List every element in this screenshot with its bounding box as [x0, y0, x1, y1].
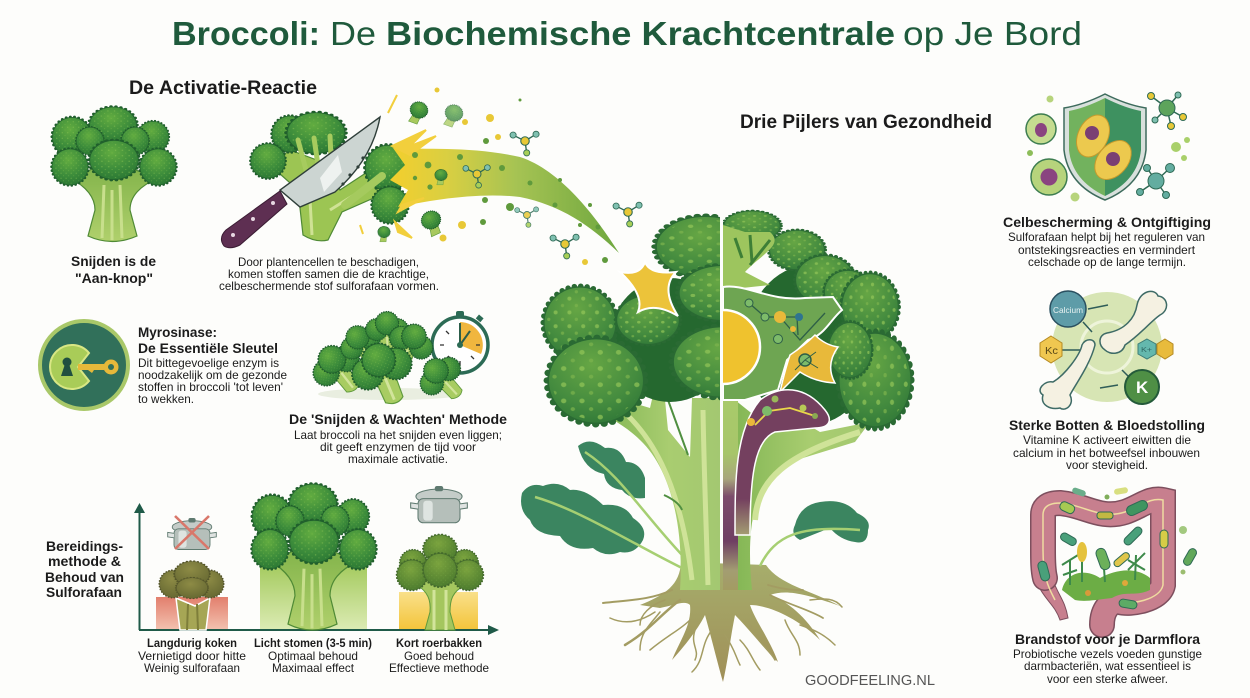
left half: crown — [540, 214, 720, 590]
text: darmflora: voor een sterke afweer. — [1047, 672, 1168, 686]
icon: pot — [411, 486, 467, 523]
title: De — [330, 15, 376, 52]
text: myrosinase: Dit bittegevoelige enzym is — [138, 356, 279, 370]
icon: stir-fried broccoli — [397, 535, 483, 630]
text: snijden en wachten: maximale activatie. — [348, 452, 448, 466]
caption: Snijden is de Aan-knop: "Aan-knop" — [75, 270, 153, 286]
icon: key and lock — [40, 321, 128, 409]
cross-section: cell — [723, 286, 842, 400]
chart title: Behoud van — [45, 569, 124, 585]
heading: Drie Pijlers van Gezondheid: Drie Pijlers van Gezondheid — [740, 112, 992, 133]
labels: langdurig koken: Vernietigd door hitte — [138, 649, 246, 663]
text: darmflora: Brandstof voor je Darmflora — [1015, 631, 1200, 647]
icon: knife — [221, 117, 380, 248]
heading: De Activatie-Reactie: De Activatie-Reactie — [129, 78, 317, 99]
panel: myrosinase — [40, 321, 287, 409]
title: Broccoli: — [172, 15, 320, 52]
text: beschadigen: Door plantencellen te beschadigen, — [238, 255, 419, 269]
axes — [134, 503, 499, 635]
text: snijden en wachten: dit geeft enzymen de tijd voor — [320, 440, 476, 454]
text: sterke botten: Sterke Botten & Bloedstolling — [1009, 417, 1205, 433]
title — [172, 15, 1082, 52]
illustration: central broccoli — [521, 211, 912, 682]
text: myrosinase: to wekken. — [138, 392, 194, 406]
text: snijden en wachten: Laat broccoli na het snijden even liggen; — [294, 428, 502, 442]
panel: whole broccoli — [52, 107, 176, 286]
text: myrosinase — [138, 324, 287, 406]
panel: sterke botten — [1009, 291, 1205, 472]
cross-section: nucleus — [723, 308, 762, 386]
icon: bones and vitamin K: Calcium — [1053, 305, 1083, 315]
labels: langdurig koken — [138, 636, 246, 675]
icon: cut broccoli pile — [303, 312, 475, 414]
chart title: Bereidings- — [46, 538, 123, 554]
chart title — [45, 538, 124, 600]
icon: shield and cells — [1026, 92, 1190, 202]
text: myrosinase: Myrosinase: — [138, 324, 217, 340]
labels: kort roerbakken: Goed behoud — [404, 649, 474, 663]
labels: langdurig koken: Langdurig koken — [147, 636, 237, 650]
text: snijden en wachten: De 'Snijden & Wachten' Methode — [289, 411, 507, 427]
panel: celbescherming — [1003, 92, 1211, 269]
text: myrosinase: noodzakelijk om de gezonde — [138, 368, 287, 382]
labels: kort roerbakken — [389, 636, 489, 675]
icon: steamed broccoli — [252, 484, 376, 630]
labels: licht stomen: Licht stomen (3-5 min) — [254, 636, 372, 650]
cross-section: yellow star — [780, 335, 838, 392]
text: celbescherming: Celbescherming & Ontgiftiging — [1003, 214, 1211, 230]
panel: darmflora — [1013, 487, 1202, 686]
icon: cut broccoli — [250, 112, 411, 241]
icon: stopwatch — [432, 311, 488, 373]
icon: bones and vitamin K: K — [1136, 378, 1149, 397]
bar: licht stomen — [260, 562, 367, 630]
labels: licht stomen: Optimaal behoud — [268, 649, 358, 663]
right half: crown and cross-section — [723, 210, 915, 590]
text: beschadigen: komen stoffen samen die de krachtige, — [228, 267, 429, 281]
labels: langdurig koken: Weinig sulforafaan — [144, 661, 240, 675]
chart title: Sulforafaan — [46, 584, 122, 600]
labels: licht stomen: Maximaal effect — [272, 661, 355, 675]
bar: langdurig koken — [156, 597, 228, 630]
text: darmflora: darmbacteriën, wat essentieel is — [1024, 659, 1191, 673]
chart: bereidingsmethode — [45, 484, 499, 675]
caption: Snijden is de Aan-knop — [71, 253, 156, 286]
title: op Je Bord — [903, 15, 1082, 52]
burst: yellow star on crown — [620, 262, 678, 316]
text: celbescherming — [1003, 214, 1211, 269]
text: sterke botten — [1009, 417, 1205, 472]
panel: cut broccoli with knife — [219, 112, 439, 293]
icon: crossed pot — [168, 516, 216, 550]
text: myrosinase: De Essentiële Sleutel — [138, 340, 278, 356]
text: celbescherming: ontstekingsreacties en vermindert — [1018, 243, 1196, 257]
icon: bones and vitamin K: K+ — [1141, 347, 1152, 354]
icon: overcooked broccoli — [159, 561, 224, 630]
text: sterke botten: Vitamine K activeert eiwitten die — [1023, 433, 1191, 447]
caption: Snijden is de Aan-knop: Snijden is de — [71, 253, 156, 269]
labels: kort roerbakken: Effectieve methode — [389, 661, 489, 675]
text: myrosinase: stoffen in broccoli 'tot leven' — [138, 380, 283, 394]
cross-section: upper stem — [723, 225, 775, 290]
panel: snijden en wachten — [289, 311, 507, 466]
labels: kort roerbakken: Kort roerbakken — [396, 636, 482, 650]
title: Biochemische Krachtcentrale — [386, 15, 895, 52]
text: darmflora — [1013, 631, 1202, 686]
icon: bones and vitamin K — [1040, 291, 1173, 409]
text: sterke botten: calcium in het botweefsel inbouwen — [1013, 446, 1200, 460]
icon: intestine with bacteria — [1037, 487, 1198, 625]
chart title: methode & — [48, 553, 121, 569]
icon: bones and vitamin K: Kc — [1045, 346, 1058, 357]
watermark: GOODFEELING.NL — [805, 673, 935, 689]
text: celbescherming: celschade op de lange termijn. — [1028, 255, 1186, 269]
text: darmflora: Probiotische vezels voeden gunstige — [1013, 647, 1202, 661]
bar: kort roerbakken — [399, 592, 478, 630]
text: sterke botten: voor stevigheid. — [1066, 458, 1148, 472]
icon: broccoli — [52, 107, 176, 241]
text: beschadigen: celbeschermende stof sulforafaan vormen. — [219, 279, 439, 293]
molecules inside cross-section — [745, 299, 825, 426]
arrow: sulforafaan stream — [360, 88, 642, 265]
text: snijden en wachten — [289, 411, 507, 466]
text: celbescherming: Sulforafaan helpt bij het reguleren van — [1008, 230, 1205, 244]
text: beschadigen — [219, 255, 439, 293]
labels: licht stomen — [254, 636, 372, 675]
roots — [603, 562, 842, 682]
cross-section: purple band — [735, 390, 829, 535]
leaves — [521, 441, 869, 568]
